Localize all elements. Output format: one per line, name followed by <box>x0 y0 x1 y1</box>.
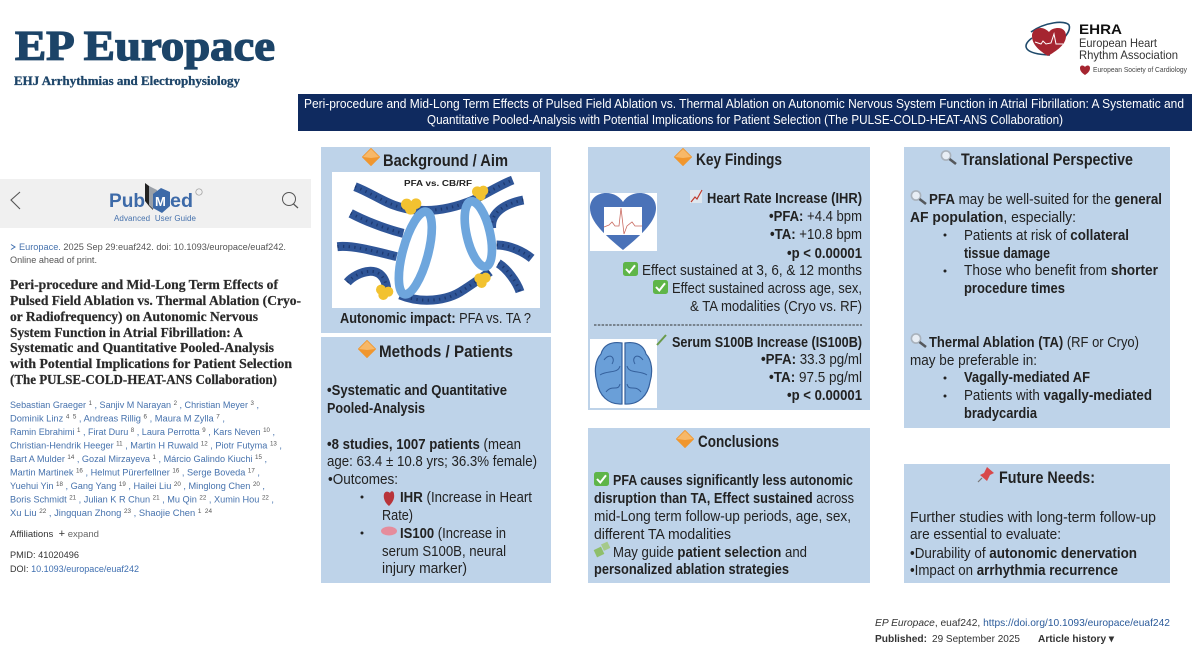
author list: 4 5 <box>66 414 77 420</box>
author list: , Shaojie Chen <box>131 508 198 519</box>
study design <box>327 383 507 417</box>
author list: , Piotr Futyma <box>208 440 270 452</box>
outcomes list: IHR (Increase in Heart <box>400 490 532 506</box>
panel: background and aim <box>321 147 551 333</box>
article title: System Function in Atrial Fibrillation: A <box>10 325 243 340</box>
author list: Martin Martinek <box>10 468 76 478</box>
author list: , Jingquan Zhong <box>46 508 124 519</box>
journal title: EP Europace <box>15 24 275 70</box>
author list: Dominik Linz <box>10 414 65 424</box>
author list: , <box>220 414 225 424</box>
PFA suitability <box>910 191 1162 297</box>
author list: 1 <box>89 400 92 407</box>
author list: 7 <box>216 414 220 420</box>
author list: 23 <box>124 508 131 515</box>
author list: , <box>254 400 259 411</box>
nerve and ablation illustration: PFA vs. CB/RF <box>404 179 472 188</box>
panel: key findings <box>588 147 870 410</box>
citation: Online ahead of print. <box>10 255 97 266</box>
citation footer: 29 September 2025 <box>932 633 1020 645</box>
title banner: Quantitative Pooled-Analysis with Potential Implications for Patient Selection (The PULSE-COLD-HEAT-ANS Collaboration) <box>427 113 1063 127</box>
conclusion text: different TA modalities <box>594 527 731 543</box>
author list: 22 <box>199 494 207 502</box>
outcomes list: serum S100B, neural <box>382 544 506 560</box>
ESC name: European Society of Cardiology <box>1093 65 1187 74</box>
EHRA full name: European Heart <box>1079 36 1158 50</box>
author list: 20 <box>174 481 181 488</box>
PFA suitability: AF population, especially: <box>910 210 1076 226</box>
icon: orange diamond <box>362 148 380 166</box>
author list: 1 24 <box>198 508 212 515</box>
future needs text: Further studies with long-term follow-up <box>910 510 1156 526</box>
icon: heart with ECG <box>590 193 657 251</box>
author list: 15 <box>255 454 262 461</box>
author list: , Christian Meyer <box>177 400 251 411</box>
author list: 10 <box>263 427 270 434</box>
outcomes list: •Outcomes: <box>328 472 398 488</box>
study design: •Systematic and Quantitative <box>327 383 507 399</box>
author list: , Helmut Pürerfellner <box>83 468 172 478</box>
author list: 8 <box>131 427 135 434</box>
EHRA full name: Rhythm Association <box>1079 48 1178 62</box>
S100B results: •PFA: 33.3 pg/ml <box>761 352 862 368</box>
article title: Systematic and Quantitative Pooled-Analysis <box>10 340 274 355</box>
S100B results: •p < 0.00001 <box>787 388 862 404</box>
conclusion text <box>594 472 854 578</box>
outcomes list: injury marker) <box>382 561 467 577</box>
PubMed logo: M <box>155 194 166 209</box>
future needs text: are essential to evaluate: <box>910 527 1061 543</box>
icon: green tick <box>657 335 666 345</box>
article title: Peri-procedure and Mid-Long Term Effects of <box>10 277 278 292</box>
PubMed header bar <box>0 179 311 228</box>
future needs text: •Impact on arrhythmia recurrence <box>910 563 1118 579</box>
conclusion text: May guide patient selection and <box>613 545 807 561</box>
author list: , Hailei Liu <box>126 481 174 492</box>
conclusion text: personalized ablation strategies <box>594 562 789 578</box>
icon: magnifier <box>941 151 956 164</box>
article title: (The PULSE-COLD-HEAT-ANS Collaboration) <box>10 372 277 387</box>
author list: 12 <box>201 440 208 448</box>
PFA suitability: tissue damage <box>964 246 1050 262</box>
author list: 14 <box>67 454 75 461</box>
heading: Methods / Patients <box>379 343 513 361</box>
author list: 18 <box>56 481 63 488</box>
author list: Xu Liu <box>10 508 37 519</box>
heart rate results: Effect sustained across age, sex, <box>672 281 862 297</box>
journal subtitle: EHJ Arrhythmias and Electrophysiology <box>14 73 240 88</box>
future needs text: •Durability of autonomic denervation <box>910 546 1137 562</box>
conclusion text: PFA causes significantly less autonomic <box>613 473 853 489</box>
heading: Translational Perspective <box>961 151 1133 169</box>
author list: , Martin H Ruwald <box>123 440 201 452</box>
citation footer: EP Europace, euaf242, https://doi.org/10.1093/europace/euaf242 <box>875 617 1170 629</box>
author list: , <box>260 481 265 492</box>
journal masthead <box>14 24 275 88</box>
author list: , Gang Yang <box>63 481 119 492</box>
author list: 11 <box>116 440 123 448</box>
PubMed logo <box>109 183 202 213</box>
author list: 6 <box>144 414 147 420</box>
icon: brain <box>381 526 397 536</box>
panel: methods and patients <box>321 337 551 583</box>
author list: 22 <box>262 494 269 502</box>
outcomes list <box>328 472 532 577</box>
author list: , Minglong Chen <box>181 481 253 492</box>
icon: green check <box>594 472 609 486</box>
EHRA name: EHRA <box>1079 21 1122 37</box>
author list: , <box>270 427 275 438</box>
author list: Bart A Mulder <box>10 454 68 465</box>
icon: green check <box>623 262 638 276</box>
citation: Europace. 2025 Sep 29:euaf242. doi: 10.1093/europace/euaf242. <box>19 242 286 253</box>
author list: , Sanjiv M Narayan <box>92 400 174 411</box>
author list: 3 <box>251 400 254 407</box>
author list <box>10 400 282 519</box>
outcomes list: Rate) <box>382 508 413 524</box>
author list: 21 <box>69 494 76 502</box>
author list: , Gozal Mirzayeva <box>74 454 153 465</box>
S100B results: Serum S100B Increase (IS100B) <box>672 335 862 351</box>
icon: orange diamond <box>676 430 694 448</box>
identifiers: PMID: 41020496 <box>10 550 79 561</box>
panel: conclusions <box>588 428 870 583</box>
conclusion text: mid-Long term follow-up periods, age, sex, <box>594 509 851 525</box>
study population: age: 63.4 ± 10.8 yrs; 36.3% female) <box>327 454 537 470</box>
citation footer <box>875 617 1170 645</box>
icon: puzzle piece <box>594 542 610 557</box>
heart rate results: Heart Rate Increase (IHR) <box>707 191 862 207</box>
author list: , Xumin Hou <box>206 494 262 506</box>
author list: , <box>255 468 260 478</box>
citation footer: Article history ▾ <box>1038 633 1115 645</box>
EHRA full name <box>1079 36 1178 62</box>
identifiers <box>10 550 139 575</box>
conclusion text: disruption than TA, Effect sustained across <box>594 491 854 507</box>
heading: Future Needs: <box>999 469 1095 487</box>
article title: or Radiofrequency) on Autonomic Nervous <box>10 309 258 324</box>
autonomic impact question: Autonomic impact: PFA vs. TA ? <box>340 311 531 327</box>
title banner <box>298 94 1192 131</box>
panel: translational perspective <box>904 147 1170 428</box>
author list: , <box>277 440 282 452</box>
PFA suitability: Patients at risk of collateral <box>964 228 1129 244</box>
icon: back chevron <box>11 192 20 209</box>
author list: 2 <box>174 400 177 407</box>
author list: 1 <box>77 427 81 434</box>
S100B results: •TA: 97.5 pg/ml <box>769 370 862 386</box>
author list: 17 <box>248 468 255 474</box>
heart rate results: Effect sustained at 3, 6, & 12 months <box>642 263 862 279</box>
thermal ablation suitability: bradycardia <box>964 406 1038 422</box>
affiliations: Affiliations + expand <box>10 528 99 540</box>
icon: green check <box>653 280 668 294</box>
thermal ablation suitability: Thermal Ablation (TA) (RF or Cryo) <box>929 335 1139 351</box>
icon: pushpin <box>978 467 994 482</box>
author list: 9 <box>202 427 206 434</box>
icon: orange diamond <box>358 340 376 358</box>
title banner: Peri-procedure and Mid-Long Term Effects of Pulsed Field Ablation vs. Thermal Ablation on Autonomic Nervous System Function in Atrial Fibrillation: A Systematic and <box>304 97 1184 111</box>
thermal ablation suitability <box>910 334 1152 422</box>
heading: Key Findings <box>696 151 782 169</box>
author list: , Firat Duru <box>80 427 131 438</box>
panel: future needs <box>904 464 1170 583</box>
citation footer: Published: <box>875 633 927 645</box>
author list: 13 <box>270 440 277 448</box>
article title: with Potential Implications for Patient Selection <box>10 356 292 371</box>
author list: 20 <box>253 481 260 488</box>
article title: Pulsed Field Ablation vs. Thermal Ablation (Cryo- <box>10 293 301 308</box>
PubMed logo: Pub <box>109 190 145 212</box>
icon: red heart with orbit <box>1026 22 1069 56</box>
heart rate results: •TA: +10.8 bpm <box>770 227 862 243</box>
heart rate results <box>623 190 862 315</box>
icon: brain <box>590 339 657 408</box>
author list: Boris Schmidt <box>10 494 69 506</box>
author list: , Julian K R Chun <box>76 494 153 506</box>
PubMed logo: ed <box>170 190 193 212</box>
PubMed article screenshot <box>0 179 311 575</box>
icon: magnifier <box>911 191 926 204</box>
icon: rising chart <box>690 190 702 203</box>
author list: 1 <box>153 454 156 461</box>
author list: Ramin Ebrahimi <box>10 427 78 438</box>
heart rate results: •PFA: +4.4 bpm <box>769 209 862 225</box>
EHRA logo <box>1026 21 1187 75</box>
icon: magnifier <box>911 334 926 347</box>
author list: Sebastian Graeger <box>10 400 91 411</box>
S100B results <box>657 335 862 404</box>
author list: , Mu Qin <box>160 494 199 506</box>
author list: , Serge Boveda <box>179 468 248 478</box>
nerve and ablation illustration <box>332 172 540 308</box>
heading: Conclusions <box>698 433 779 451</box>
author list: 16 <box>76 468 83 474</box>
author list: , Kars Neven <box>206 427 263 438</box>
author list: , Andreas Rillig <box>76 414 144 424</box>
PFA suitability: PFA may be well-suited for the general <box>929 192 1162 208</box>
study population <box>327 437 537 470</box>
PubMed nav links: Advanced User Guide <box>114 214 197 223</box>
author list: 19 <box>119 481 126 488</box>
author list: 22 <box>39 508 47 515</box>
author list: , Márcio Galindo Kiuchi <box>156 454 255 465</box>
study population: •8 studies, 1007 patients (mean <box>327 437 521 453</box>
article title <box>10 277 301 387</box>
icon: anatomical heart <box>384 491 394 506</box>
author list: , Laura Perrotta <box>134 427 202 438</box>
ESC small heart <box>1080 66 1090 75</box>
thermal ablation suitability: Patients with vagally-mediated <box>964 388 1152 404</box>
thermal ablation suitability: may be preferable in: <box>910 353 1037 369</box>
heading: Background / Aim <box>383 152 508 170</box>
heart rate results: & TA modalities (Cryo vs. RF) <box>690 299 862 315</box>
identifiers: DOI: 10.1093/europace/euaf242 <box>10 564 139 575</box>
author list: , Maura M Zylla <box>147 414 216 424</box>
heart rate results: •p < 0.00001 <box>787 246 862 262</box>
icon: search <box>282 192 298 208</box>
author list: , <box>262 454 267 465</box>
author list: 21 <box>153 494 160 502</box>
future needs text <box>910 510 1156 579</box>
PFA suitability: procedure times <box>964 281 1065 297</box>
outcomes list: IS100 (Increase in <box>400 526 506 542</box>
icon: orange diamond <box>674 148 692 166</box>
PFA suitability: Those who benefit from shorter <box>964 263 1158 279</box>
thermal ablation suitability: Vagally-mediated AF <box>964 370 1090 386</box>
citation <box>10 242 286 266</box>
author list: , <box>269 494 274 506</box>
author list: Yuehui Yin <box>10 481 55 492</box>
author list: 16 <box>172 468 180 474</box>
author list: Christian-Hendrik Heeger <box>10 440 118 452</box>
study design: Pooled-Analysis <box>327 401 425 417</box>
